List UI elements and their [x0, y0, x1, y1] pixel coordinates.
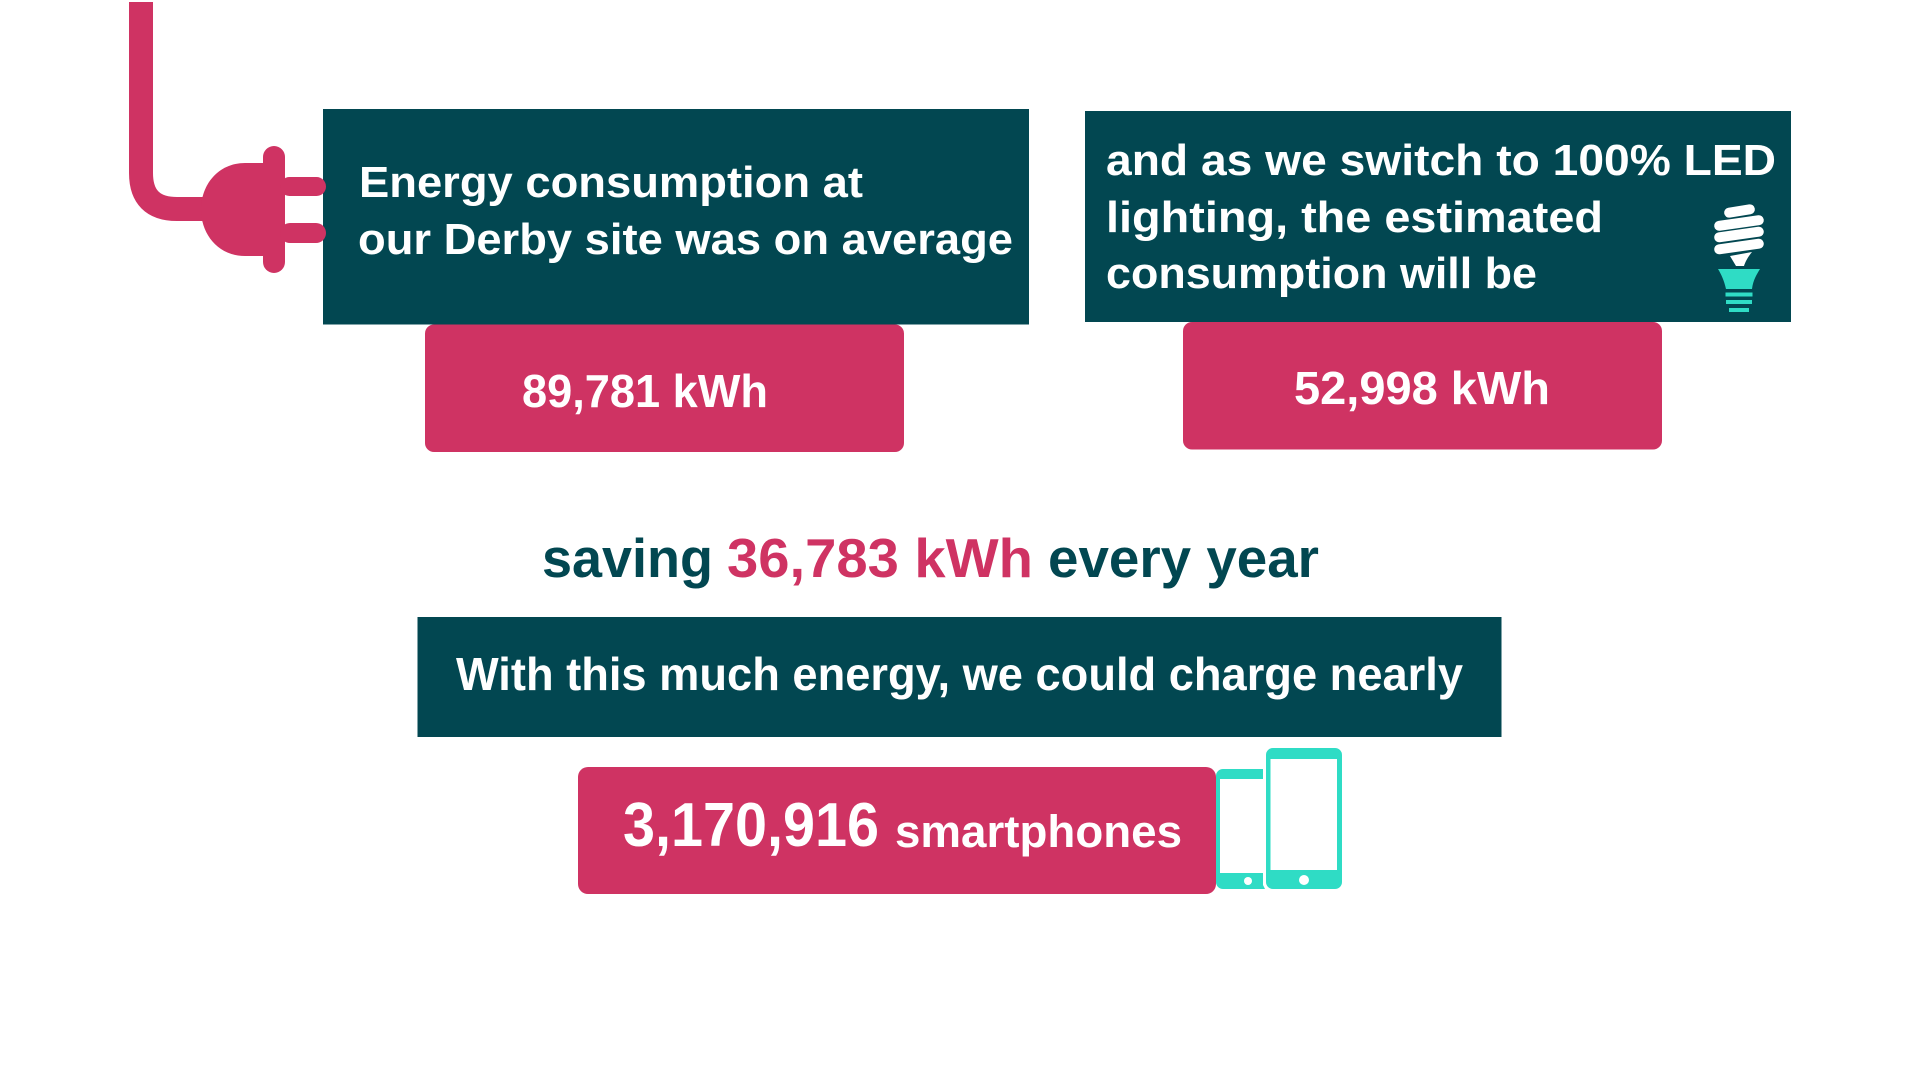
panel: smartphones value	[578, 767, 1216, 894]
icon: large phone	[1266, 748, 1342, 889]
text block: energy consumption intro	[358, 158, 1013, 264]
panel: 89,781 kWh value: 89,781 kWh	[522, 365, 768, 417]
text block: LED switch explanation	[1106, 136, 1776, 298]
heading: annual saving: 36,783 kWh	[727, 527, 1033, 589]
panel: smartphones value: smartphones	[895, 806, 1182, 857]
panel: average consumption	[323, 109, 1029, 324]
text block: energy consumption intro: our Derby site was on average	[358, 215, 1013, 264]
text block: LED switch explanation: consumption will be	[1106, 249, 1537, 298]
panel: 89,781 kWh value	[425, 324, 904, 452]
text block: energy consumption intro: Energy consumption at	[359, 158, 863, 207]
icon: low-energy light bulb	[1714, 204, 1764, 312]
icon: electric plug with cord	[141, 2, 326, 273]
panel: 52,998 kWh value	[1183, 322, 1662, 450]
icon: small phone	[1216, 769, 1265, 889]
panel: smartphones value: 3,170,916	[623, 791, 879, 860]
heading: annual saving: every year	[1048, 527, 1319, 589]
icon: smartphone and tablet	[1216, 748, 1342, 889]
heading: annual saving: saving	[542, 527, 713, 589]
text block: LED switch explanation: and as we switch to 100% LED	[1106, 136, 1776, 185]
panel: charging statement	[418, 617, 1502, 737]
panel: LED lighting estimate	[1085, 111, 1791, 322]
heading: annual saving	[542, 527, 1319, 589]
panel: 52,998 kWh value: 52,998 kWh	[1294, 362, 1550, 414]
text block: LED switch explanation: lighting, the estimated	[1106, 193, 1603, 242]
panel: charging statement: With this much energy, we could charge nearly	[456, 648, 1463, 700]
